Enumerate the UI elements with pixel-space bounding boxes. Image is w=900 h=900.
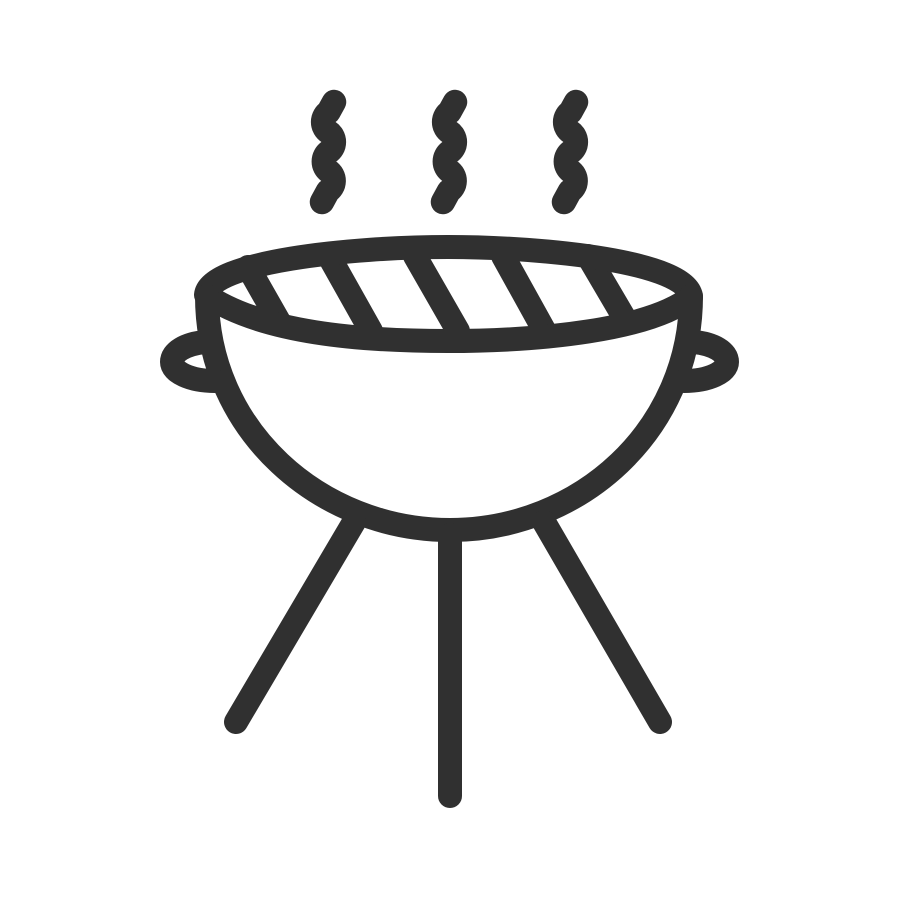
left leg bbox=[236, 522, 354, 722]
center leg bbox=[438, 535, 462, 796]
grill grate bars bbox=[248, 256, 625, 331]
icon: smoke middle bbox=[443, 102, 455, 202]
icon: smoke right bbox=[564, 102, 576, 202]
left handle bbox=[172, 342, 215, 381]
right leg bbox=[544, 522, 660, 722]
right handle bbox=[684, 342, 727, 381]
icon: smoke left bbox=[322, 102, 334, 202]
grill bowl bbox=[207, 296, 691, 530]
grill rim bbox=[206, 247, 691, 341]
